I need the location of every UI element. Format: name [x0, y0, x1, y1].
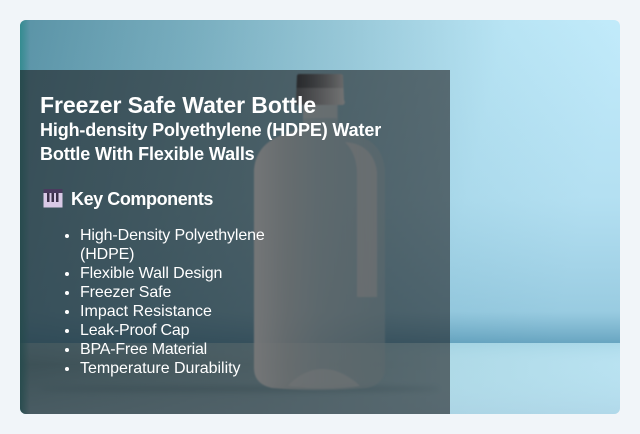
list: key components: Temperature Durability: [80, 360, 241, 377]
subtitle line 2: Bottle With Flexible Walls: [40, 144, 255, 164]
list: key components: Freezer Safe: [80, 284, 171, 301]
list: key components: BPA-Free Material: [80, 341, 207, 358]
bottle: [254, 74, 385, 390]
list: key components: (HDPE): [80, 246, 134, 263]
title: Freezer Safe Water Bottle: [40, 92, 316, 118]
list: key components: Impact Resistance: [80, 303, 212, 320]
list: key components: Leak-Proof Cap: [80, 322, 189, 339]
list: key components: Flexible Wall Design: [80, 265, 222, 282]
floor shadow: [40, 386, 440, 392]
subtitle line 1: High-density Polyethylene (HDPE) Water: [40, 120, 381, 140]
heading: key components: Key Components: [71, 189, 213, 209]
list: key components: High-Density Polyethylene: [80, 227, 265, 244]
translucent text panel: [20, 70, 450, 414]
list: key components: [65, 227, 265, 377]
icon: piano keyboard: [44, 189, 62, 208]
